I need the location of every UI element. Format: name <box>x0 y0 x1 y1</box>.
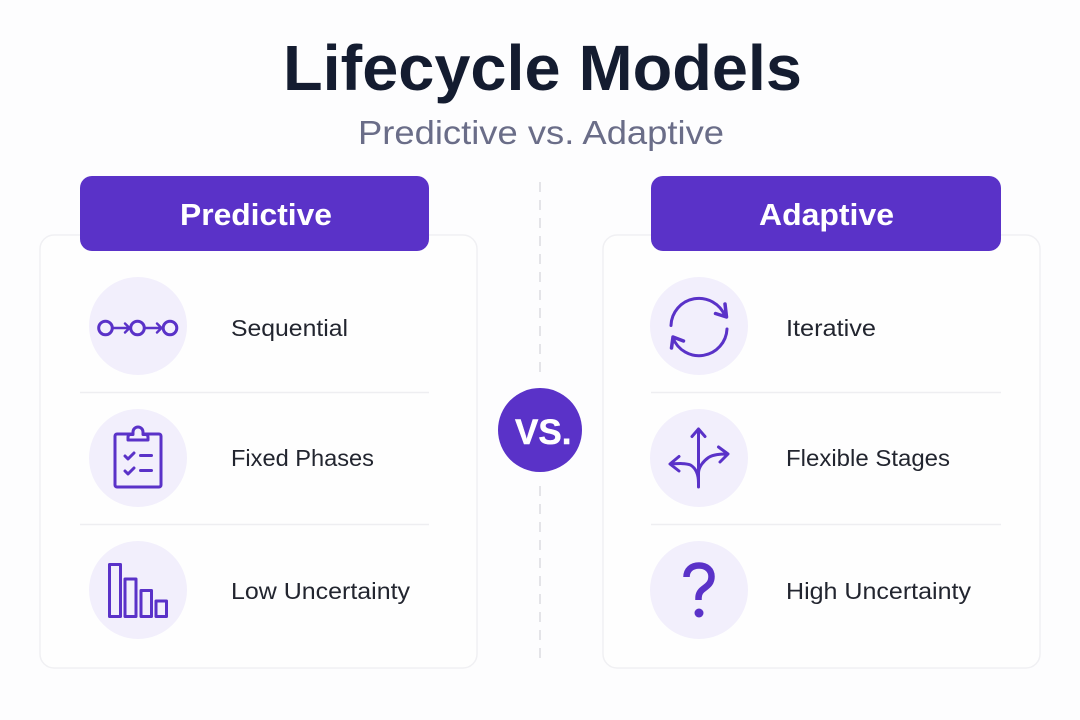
row: flexible stages <box>650 409 950 507</box>
row: iterative: Iterative <box>786 315 876 341</box>
row: high uncertainty: High Uncertainty <box>786 578 971 604</box>
icon: branching arrows <box>670 429 728 487</box>
panel: adaptive <box>603 176 1040 668</box>
icon: question mark <box>686 566 712 618</box>
vs badge <box>498 388 582 472</box>
row: iterative <box>650 277 876 375</box>
row: sequential: Sequential <box>231 315 348 341</box>
panel: predictive <box>40 176 477 668</box>
icon: sequential nodes <box>99 321 177 335</box>
row: fixed phases <box>89 409 374 507</box>
header: adaptive <box>651 176 1001 251</box>
icon: clipboard checklist <box>115 427 161 487</box>
icon: descending bars <box>110 564 166 616</box>
row: sequential <box>89 277 348 375</box>
title: Lifecycle Models <box>283 32 802 104</box>
icon: cycle arrows <box>671 298 727 356</box>
row: flexible stages: Flexible Stages <box>786 445 950 471</box>
header: adaptive: Adaptive <box>759 197 894 232</box>
header: predictive: Predictive <box>180 197 332 232</box>
row: fixed phases: Fixed Phases <box>231 445 374 471</box>
subtitle: Predictive vs. Adaptive <box>358 114 724 151</box>
header: predictive <box>80 176 429 251</box>
row: low uncertainty: Low Uncertainty <box>231 578 410 604</box>
center divider <box>539 182 541 662</box>
row: high uncertainty <box>650 541 971 639</box>
vs badge: VS. <box>515 413 571 452</box>
row: low uncertainty <box>89 541 410 639</box>
